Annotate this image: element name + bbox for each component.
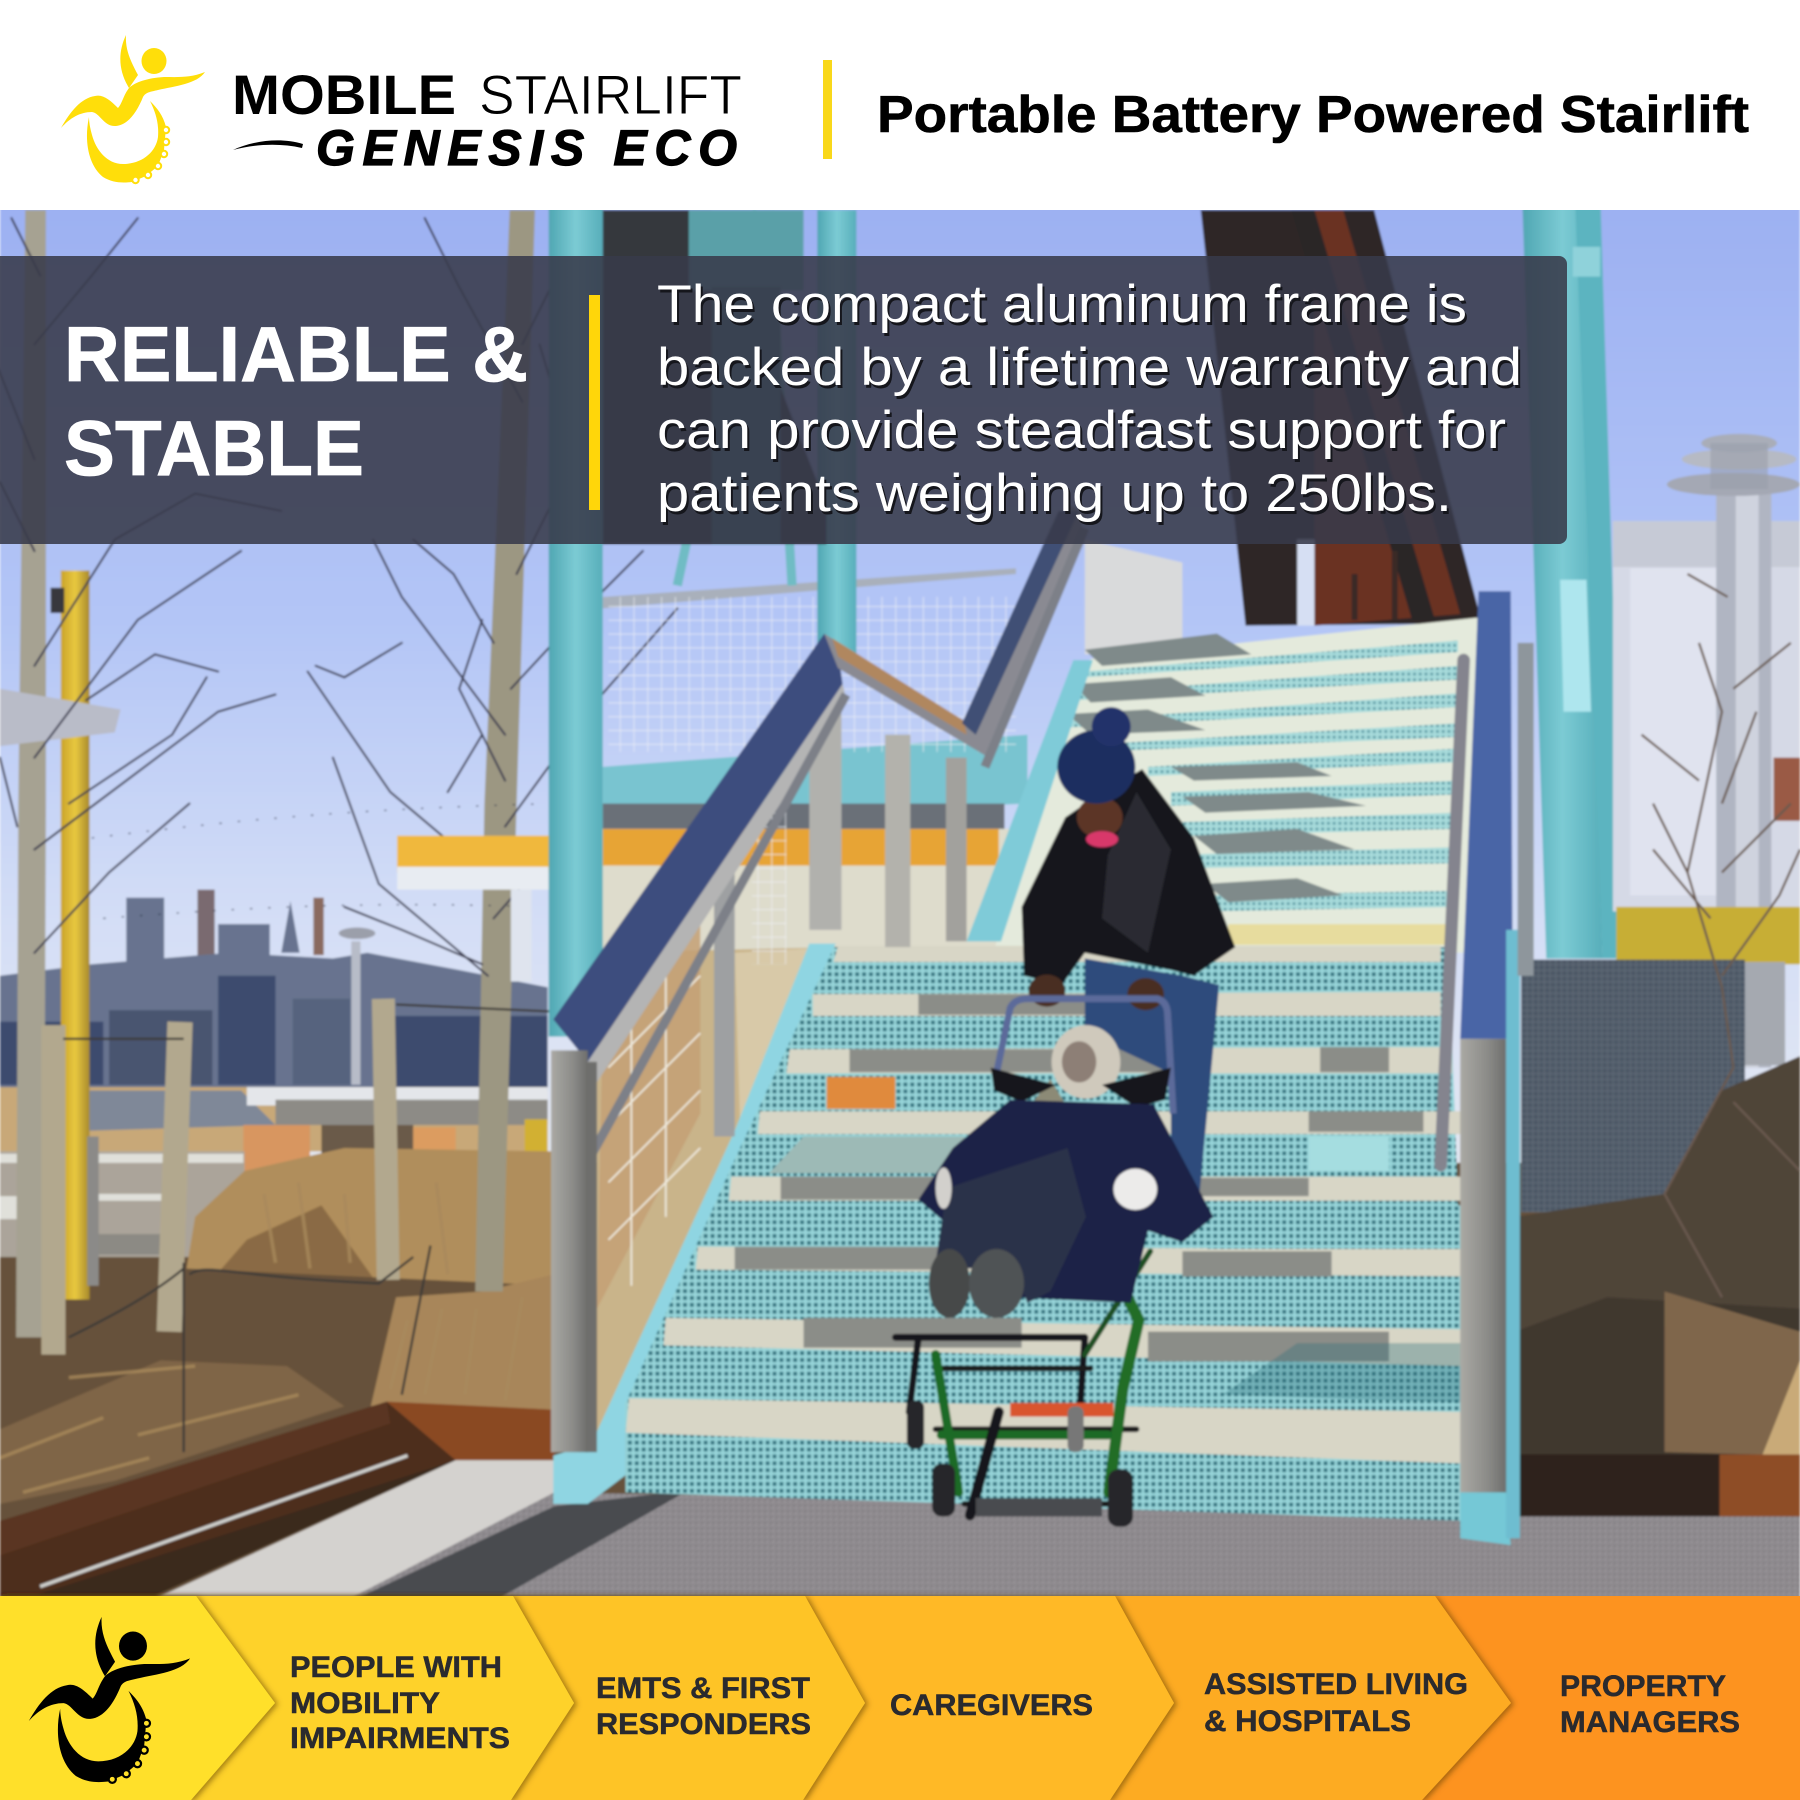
left handrail [551, 505, 1086, 1452]
jacket [1022, 769, 1235, 985]
header background [0, 0, 1800, 210]
body copy: can provide steadfast support for [657, 401, 1506, 460]
label: assisted living and hospitals: & HOSPITALS [1204, 1705, 1411, 1738]
hat [1057, 730, 1135, 804]
label: EMTs and first responders: RESPONDERS [596, 1708, 811, 1741]
logo wordmark: STAIRLIFT [479, 63, 742, 126]
right shrubs and mesh fence [1515, 574, 1800, 1516]
chair base and frame [895, 1246, 1150, 1515]
audience chevron band [0, 1596, 1800, 1800]
skyline [0, 890, 548, 1091]
gloves [1114, 1169, 1157, 1210]
hands [1029, 975, 1065, 1007]
photo: stairlift on outdoor stairs [0, 195, 1800, 1611]
label: people with mobility impairments: MOBILITY [290, 1687, 440, 1720]
logo wordmark: GENESIS ECO [316, 120, 737, 176]
building and lamp on right [1613, 434, 1800, 1068]
body copy: The compact aluminum frame is [657, 275, 1467, 334]
shoes [929, 1249, 970, 1318]
lower stair flight [626, 946, 1469, 1521]
body copy: patients weighing up to 250lbs. [657, 464, 1452, 523]
headline: RELIABLE & [64, 310, 528, 398]
railing mesh and posts [597, 706, 967, 1309]
label: property managers: PROPERTY [1560, 1670, 1726, 1703]
header divider [823, 60, 832, 159]
head and scarf [1077, 797, 1123, 838]
label: caregivers: CAREGIVERS [890, 1689, 1093, 1722]
left stair stringer [553, 660, 1093, 1504]
patient on stairlift chair [895, 999, 1213, 1527]
right handrail and post [1441, 591, 1534, 1545]
mulch ground [0, 1268, 554, 1521]
icon: black wheelchair figure [29, 1617, 190, 1783]
planter: corten steel [0, 1402, 554, 1596]
string lights [92, 804, 551, 918]
text panel [0, 256, 1567, 544]
panel divider [589, 295, 600, 510]
hair [1052, 1025, 1120, 1099]
sky [0, 195, 1800, 1163]
dark upper left structure [603, 210, 827, 544]
label: property managers: MANAGERS [1560, 1706, 1740, 1739]
logo: yellow wheelchair figure [61, 35, 205, 183]
jeans [1085, 959, 1219, 1194]
fill behind left railing [597, 947, 838, 1492]
chair handle [996, 999, 1173, 1114]
headline [64, 310, 528, 492]
body copy: backed by a lifetime warranty and [657, 338, 1522, 397]
logo wordmark [232, 63, 742, 176]
headrest straps [991, 1068, 1056, 1102]
pavement [149, 1460, 1800, 1601]
body copy [657, 275, 1522, 523]
header tagline: Portable Battery Powered Stairlift [877, 86, 1749, 144]
label: people with mobility impairments: IMPAIRMENTS [290, 1722, 510, 1755]
label: EMTs and first responders: EMTS & FIRST [596, 1672, 810, 1705]
woman caregiver pushing chair [1022, 707, 1235, 1194]
label: people with mobility impairments: PEOPLE WITH [290, 1651, 502, 1684]
label: assisted living and hospitals [1204, 1668, 1468, 1738]
bare trees and posts [0, 210, 677, 1452]
low buildings and grass [0, 1087, 554, 1406]
label: EMTs and first responders [596, 1672, 811, 1741]
logo wordmark: MOBILE [232, 63, 456, 126]
headline: STABLE [64, 404, 364, 492]
teal column left [549, 195, 603, 1037]
label: people with mobility impairments [290, 1651, 510, 1755]
label: assisted living and hospitals: ASSISTED LIVING [1204, 1668, 1468, 1701]
legs [936, 1148, 1086, 1303]
rusted steel tower [1201, 210, 1482, 626]
upper stair flight [993, 618, 1477, 953]
coat [918, 1100, 1213, 1303]
label: property managers [1560, 1670, 1740, 1739]
back structure: platform and building [397, 210, 1182, 1492]
teal tower right [1522, 195, 1624, 959]
